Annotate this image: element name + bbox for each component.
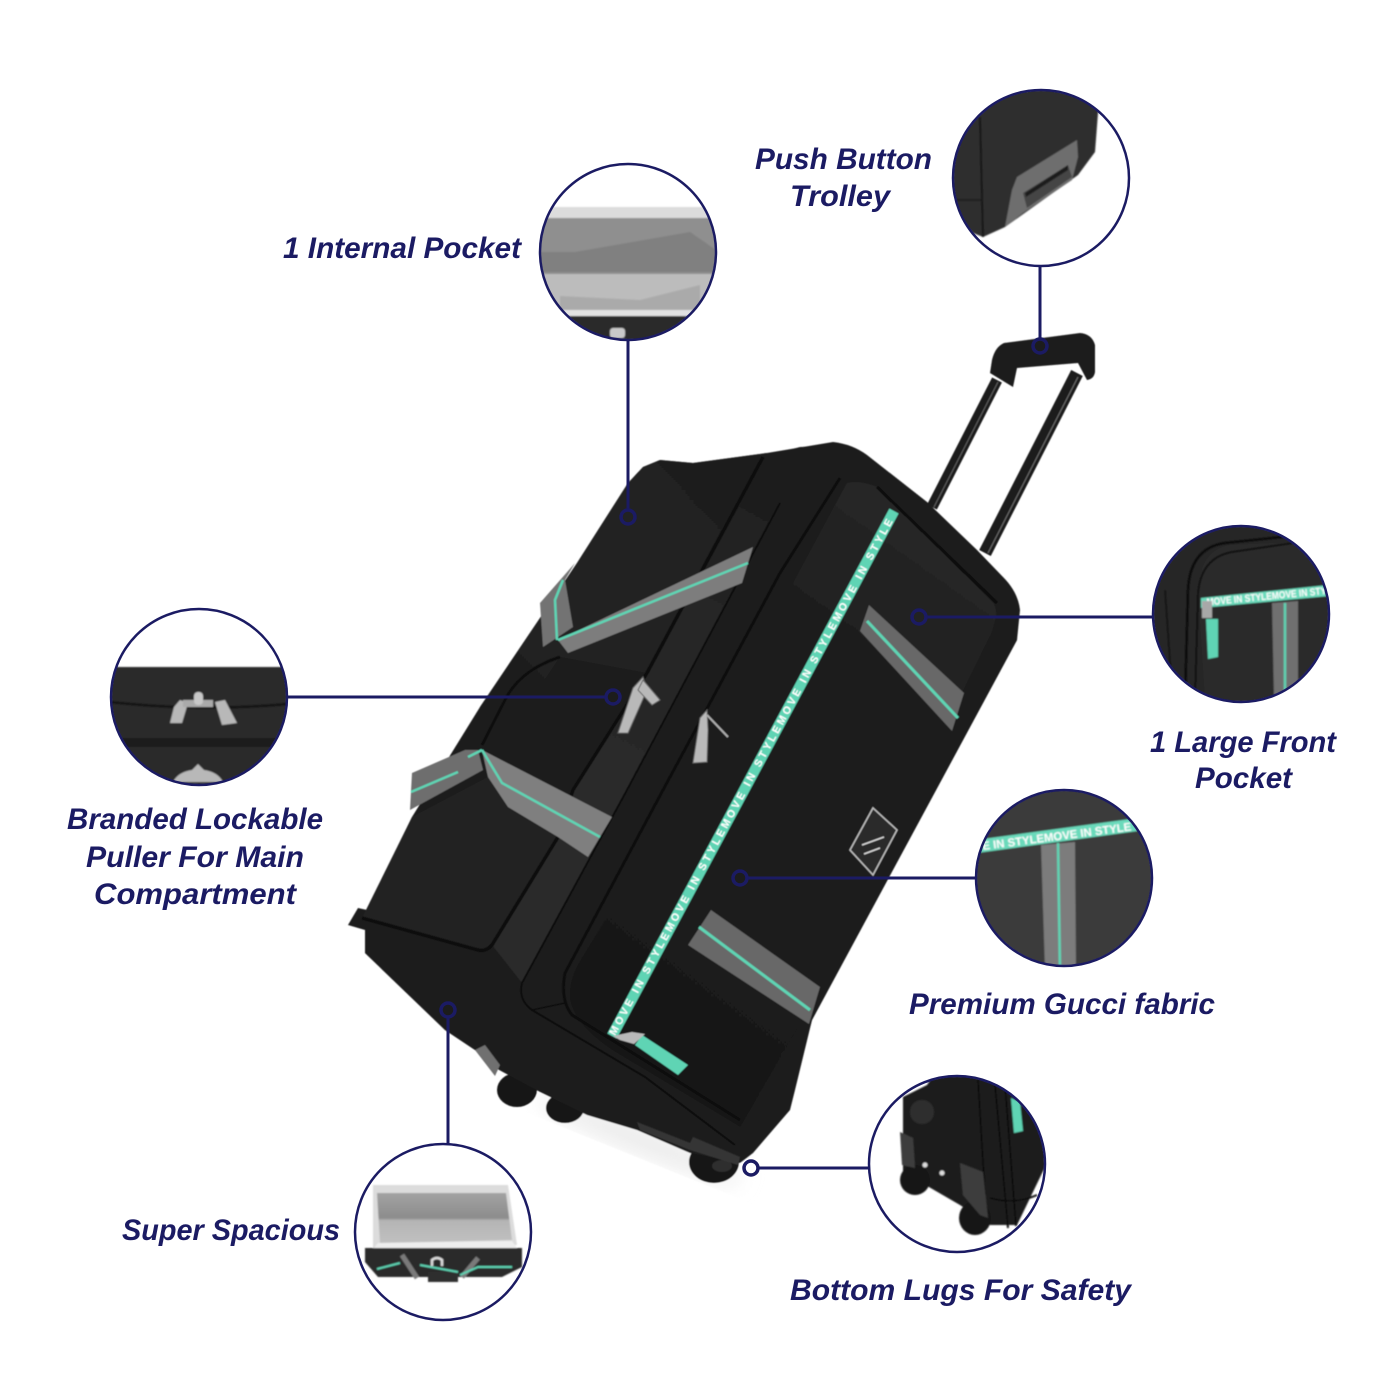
telescopic trolley handle [932,333,1095,553]
handle pocket recess [500,657,647,790]
heading: Branded Lockable Puller For Main Compartment: Puller For Main [86,841,304,874]
lower carry handle [410,750,612,857]
heading: 1 Large Front Pocket [1150,726,1338,795]
heading: 1 Large Front Pocket: 1 Large Front [1150,726,1338,759]
heading: 1 Large Front Pocket: Pocket [1195,762,1294,795]
panel: super spacious detail [355,1144,531,1320]
right outer band [740,600,1017,1150]
panel: bottom lugs detail [869,1076,1048,1252]
infographic: duffle trolley features [68,88,1337,1322]
side buckle [475,1045,500,1076]
zipper and seam lines [362,457,997,1145]
panel: large front pocket detail: MOVE IN STYLEMOVE IN STY [1206,586,1327,608]
heading: Super Spacious: Super Spacious [122,1214,340,1247]
mint zipper tag [613,1032,688,1075]
connector: premium fabric [733,871,977,885]
mint stripe with text: MOVE IN STYLEMOVE IN STYLEMOVE IN STYLEMOVE IN STYLEMOVE IN STYLE [608,518,894,1036]
band between seam and front zipper [522,446,847,1012]
panel: large front pocket detail [1150,525,1335,705]
bottom lug bracket [637,1122,740,1165]
brand badge [850,808,897,875]
grey strap with mint line, lower [688,910,820,1024]
connector: bottom lugs [744,1161,870,1175]
heading: 1 Internal Pocket: 1 Internal Pocket [283,232,523,265]
front panel [570,482,996,1127]
heading: Bottom Lugs For Safety: Bottom Lugs For Safety [790,1274,1132,1307]
bottom end panel [365,925,540,1092]
heading: Push Button Trolley [755,143,932,213]
panel: push button trolley detail [940,80,1129,266]
connector: internal pocket [621,340,635,524]
heading: Branded Lockable Puller For Main Compartment: Branded Lockable [67,803,323,836]
floor shadow [533,1086,747,1194]
heading: Branded Lockable Puller For Main Compartment [67,803,323,911]
grey strap with mint line, upper [860,605,964,731]
bag body silhouette [348,442,1020,1163]
connector: super spacious [441,1003,455,1145]
top carry handle [540,547,753,653]
top side panel [480,453,767,747]
connector: large front pocket [912,610,1153,624]
lighter band between zippers [492,447,800,983]
lower end pocket [362,777,558,950]
main product: duffle trolley bag [348,332,1096,1184]
panel: premium fabric detail: E IN STYLEMOVE IN STYLE [982,821,1132,853]
heading: Push Button Trolley: Push Button [755,143,932,176]
heading: Premium Gucci fabric: Premium Gucci fabric [909,988,1215,1021]
heading: Push Button Trolley: Trolley [790,180,891,213]
zipper puller front [693,710,728,763]
panel: premium fabric detail [974,788,1154,968]
zipper pullers main [618,677,660,733]
panel: lockable puller detail [110,609,288,787]
panel: internal pocket detail [540,164,716,342]
connector: push button trolley [1033,266,1047,353]
heading: Branded Lockable Puller For Main Compartment: Compartment [94,878,298,911]
wheels [497,1073,739,1183]
connector: lockable puller [287,690,620,704]
